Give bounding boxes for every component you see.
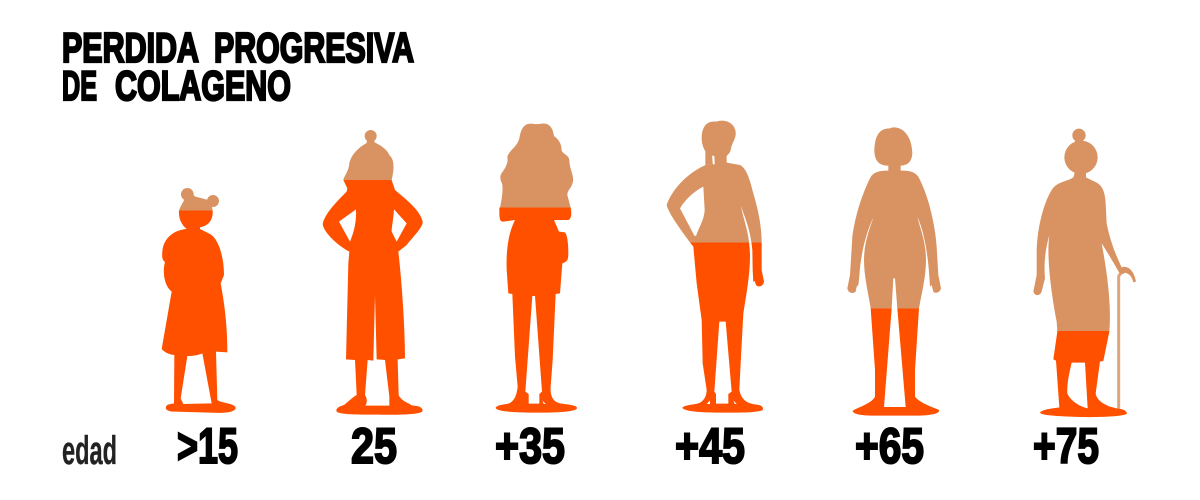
title: PERDIDA [62,24,199,71]
age label: +45: +45 [675,418,745,474]
figure: elderly woman age 75 [1033,129,1136,417]
title: PROGRESIVA [214,24,414,71]
icon: walking cane [1119,272,1124,409]
age label: >15: >15 [177,418,238,474]
title: DE [62,62,97,109]
figure: woman age 65 [847,127,941,416]
figure: woman age 45 [667,121,764,413]
title [62,24,414,109]
figure: girl under 15 [162,188,236,413]
figure: woman age 25 [323,130,423,415]
age label: +65: +65 [855,418,924,474]
age label: +75: +75 [1033,418,1099,474]
age label: 25: 25 [351,418,397,474]
axis label: edad: edad [62,429,117,473]
figure: woman age 35 [496,124,577,413]
age label: +35: +35 [495,418,565,474]
title: COLAGENO [115,62,291,109]
